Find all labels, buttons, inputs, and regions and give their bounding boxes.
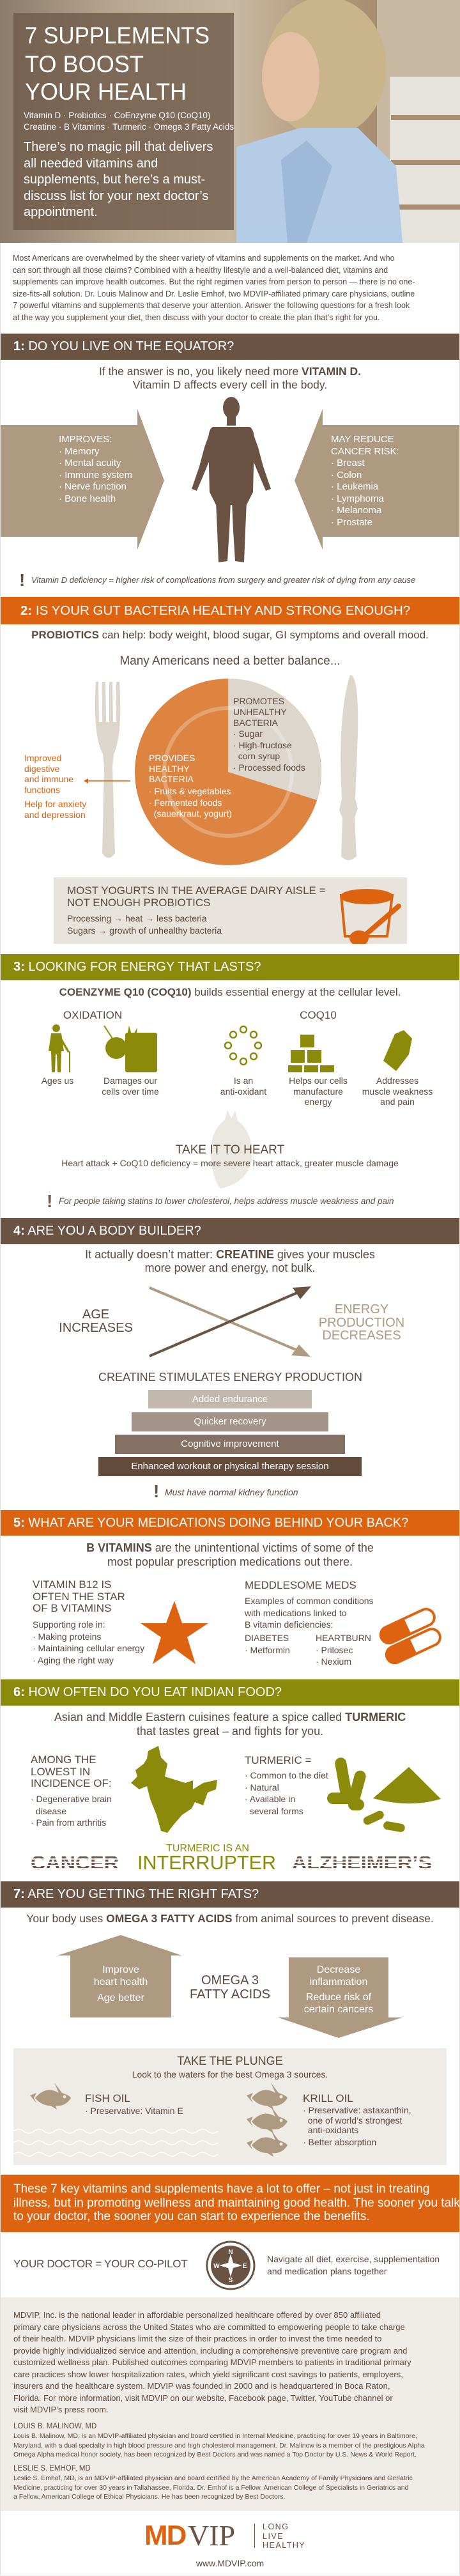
logo MDVIP: LONG — [263, 2522, 289, 2531]
text: Heart attack + CoQ10 deficiency = more severe heart attack, greater muscle damage — [61, 1158, 399, 1168]
improves list: · Bone health — [59, 493, 116, 504]
cancer risk list — [331, 434, 399, 528]
about panel: care practices show lower hospitalization rates, which yield significant cost savings to patients, employers, — [13, 2370, 403, 2379]
benefits text orange: functions — [24, 785, 60, 795]
navigate text: and medication plans together — [267, 2266, 387, 2276]
header 6 — [0, 1679, 460, 1706]
text: · Natural — [245, 1782, 279, 1792]
panel: take the plunge: anti-oxidants — [308, 2125, 358, 2135]
text: with medications linked to — [245, 1608, 347, 1618]
icon: yogurt cup and spoon — [340, 889, 401, 944]
text: · Degenerative brain — [31, 1794, 112, 1804]
hero title box: YOUR HEALTH — [25, 79, 187, 105]
text: · Prilosec — [316, 1645, 353, 1655]
take it to heart: TAKE IT TO HEART — [176, 1143, 284, 1157]
b vitamins intro — [86, 1541, 374, 1568]
text: corn syrup — [238, 751, 280, 761]
text: Damages our — [103, 1076, 157, 1086]
hero title box: Vitamin D · Probiotics · CoEnzyme Q10 (CoQ10) — [24, 111, 210, 120]
header 4: 4: ARE YOU A BODY BUILDER? — [13, 1224, 201, 1238]
cancer risk list: · Leukemia — [331, 481, 378, 492]
header 6: 6: HOW OFTEN DO YOU EAT INDIAN FOOD? — [13, 1685, 282, 1699]
energy decreases: ENERGY — [335, 1302, 388, 1316]
hero title box: 7 SUPPLEMENTS — [25, 22, 210, 49]
b vitamins intro: most popular prescription medications out there. — [107, 1555, 353, 1568]
turmeric interrupter banner: INTERRUPTER — [137, 1851, 276, 1874]
about panel: customized wellness plan. Published outcomes comparing MDVIP members to patients in traditional primary — [13, 2357, 411, 2367]
omega center label — [190, 1973, 270, 2001]
panel: take the plunge — [13, 2048, 447, 2165]
text: · Aging the right way — [33, 1655, 114, 1665]
intro paragraph: 7 powerful vitamins and supplements that deserve your attention. Answer the following questions for a fresh look — [13, 301, 410, 310]
vitamin D intro: Vitamin D affects every cell in the body. — [133, 378, 327, 391]
yogurt callout box: MOST YOGURTS IN THE AVERAGE DAIRY AISLE = — [67, 884, 326, 897]
text: Is an — [234, 1076, 253, 1086]
text: and depression — [24, 810, 86, 820]
yogurt callout box: Sugars → growth of unhealthy bacteria — [67, 925, 222, 936]
about panel: Florida. For more information, visit MDVIP on our website, Facebook page, Twitter, YouTube channel or — [13, 2393, 393, 2403]
hero title box — [13, 13, 234, 230]
down arrow text: Decrease — [317, 1964, 360, 1975]
text: several forms — [250, 1806, 303, 1816]
text: · Fermented foods — [149, 798, 222, 808]
your doctor co-pilot: YOUR DOCTOR = YOUR CO-PILOT — [13, 2258, 187, 2270]
cancer risk list: CANCER RISK: — [331, 446, 399, 456]
about panel: provide highly individualized service and attention, including a comprehensive preventive care program and — [13, 2345, 407, 2356]
age increases — [59, 1307, 133, 1335]
text: Helps our cells — [289, 1076, 348, 1086]
text: certain cancers — [304, 2004, 373, 2014]
vitamin D intro — [99, 365, 361, 391]
about panel: Medicine, practicing for over 30 years in Tallahassee, Florida. Dr. Emhof is a Fellow, American College of Specialists in Geriatrics and — [13, 2483, 408, 2491]
intro paragraph — [13, 254, 415, 322]
label coq10: COQ10 — [300, 1009, 337, 1021]
icon: compass: S — [229, 2277, 233, 2284]
cancer risk list: MAY REDUCE — [331, 434, 394, 445]
about panel: Louis B. Malinow, MD, is an MDVIP-affiliated physician and board certified in Internal Medicine, practicing for over 19 years in Baltimore, — [13, 2432, 417, 2440]
creatine pyramid: Cognitive improvement — [181, 1438, 279, 1449]
text: · Nexium — [316, 1656, 351, 1667]
up arrow text: heart health — [94, 1976, 148, 1987]
down arrow text — [310, 1964, 367, 1987]
plate text: unhealthy: PROMOTES — [233, 696, 284, 706]
note statins: ! — [47, 1191, 52, 1211]
header 2 — [0, 597, 460, 624]
creatine intro: It actually doesn’t matter: CREATINE gives your muscles — [85, 1248, 375, 1261]
note: vitamin D deficiency: Vitamin D deficiency = higher risk of complications from surgery and greater risk of dying from any cause — [31, 575, 415, 585]
closing callout orange — [0, 2175, 460, 2232]
text: disease — [36, 1806, 66, 1816]
hero title box: Creatine · B Vitamins · Turmeric · Omega 3 Fatty Acids — [24, 122, 234, 132]
omega center label: FATTY ACIDS — [190, 1987, 270, 2001]
turmeric interrupter banner: TURMERIC IS AN — [166, 1843, 249, 1854]
text: DIABETES — [245, 1633, 289, 1643]
cancer risk list: · Breast — [331, 458, 365, 468]
plate text: unhealthy: BACTERIA — [233, 718, 278, 728]
b12 panel: VITAMIN B12 IS — [33, 1578, 111, 1591]
turmeric interrupter banner: ALZHEIMER’S — [292, 1853, 432, 1874]
about panel: insurers and the healthcare system. MDVIP was founded in 2000 and is headquartered in Boca Raton, — [13, 2381, 390, 2391]
vitamin D intro: If the answer is no, you likely need more VITAMIN D. — [99, 365, 361, 378]
panel: take the plunge: TAKE THE PLUNGE — [177, 2055, 283, 2067]
benefits text orange — [24, 753, 73, 795]
benefits text orange: and immune — [24, 774, 73, 784]
icon: compass: N — [228, 2249, 233, 2256]
india panel text: LOWEST IN — [31, 1766, 90, 1778]
turmeric intro — [54, 1711, 406, 1738]
logo MDVIP: LIVE — [263, 2532, 284, 2541]
text: Examples of common conditions — [245, 1596, 374, 1606]
note kidney: Must have normal kidney function — [165, 1487, 298, 1497]
text: anti-oxidant — [220, 1086, 266, 1097]
energy decreases: PRODUCTION — [319, 1315, 404, 1329]
captions: Ages us — [42, 1076, 73, 1086]
panel: take the plunge: FISH OIL — [85, 2092, 130, 2104]
website: www.MDVIP.com — [196, 2558, 264, 2568]
intro paragraph: size-fits-all solution. Dr. Louis Malinow and Dr. Leslie Emhof, two MDVIP-affiliated primary care physicians, outline — [13, 289, 415, 298]
b12 panel: OFTEN THE STAR — [33, 1591, 125, 1603]
text: Age better — [97, 1993, 144, 2003]
header 5: 5: WHAT ARE YOUR MEDICATIONS DOING BEHIND YOUR BACK? — [13, 1516, 408, 1530]
intro paragraph: can sort through all those claims? Combined with a healthy lifestyle and a well-balanced diet, vitamins and — [13, 266, 388, 275]
text: · Available in — [245, 1794, 295, 1804]
cancer risk list: · Colon — [331, 469, 362, 481]
balance heading: Many Americans need a better balance... — [119, 654, 341, 668]
logo MDVIP: MD — [144, 2520, 185, 2551]
turmeric intro: that tastes great – and fights for you. — [137, 1725, 323, 1738]
text: Addresses — [376, 1076, 418, 1086]
text: · Fruits & vegetables — [149, 786, 231, 796]
text: · Pain from arthritis — [31, 1817, 106, 1828]
text: · Sugar — [233, 729, 263, 739]
text: and pain — [380, 1097, 415, 1107]
panel: take the plunge: · Better absorption — [303, 2137, 376, 2147]
about panel: Maryland, with a dual specialty in high blood pressure and high cholesterol management. Dr. Malinow is a member of the prestigious Alpha — [13, 2441, 425, 2449]
india panel text: AMONG THE — [31, 1754, 96, 1766]
text: · High-fructose — [233, 740, 292, 750]
improves list: · Mental acuity — [59, 458, 121, 468]
benefits text orange: Improved — [24, 753, 61, 763]
creatine pyramid — [98, 1371, 362, 1476]
plate text: unhealthy: UNHEALTHY — [233, 707, 287, 717]
yogurt callout box: NOT ENOUGH PROBIOTICS — [67, 896, 211, 909]
text: · Maintaining cellular energy — [33, 1643, 144, 1653]
about panel: visit MDVIP’s press room. — [13, 2405, 109, 2414]
navigate text: Navigate all diet, exercise, supplementation — [267, 2254, 440, 2264]
about panel — [0, 2297, 460, 2511]
b12 panel: OF B VITAMINS — [33, 1602, 111, 1614]
benefits text orange: digestive — [24, 764, 59, 774]
hero photo — [0, 0, 460, 243]
yogurt callout box: Processing → heat → less bacteria — [67, 913, 207, 923]
omega intro: Your body uses OMEGA 3 FATTY ACIDS from animal sources to prevent disease. — [26, 1912, 434, 1925]
creatine pyramid: Quicker recovery — [194, 1416, 266, 1427]
cancer risk list: · Lymphoma — [331, 493, 384, 504]
header 4 — [0, 1218, 460, 1244]
creatine pyramid: CREATINE STIMULATES ENERGY PRODUCTION — [98, 1371, 362, 1384]
logo MDVIP: VIP — [188, 2519, 235, 2552]
hero title box: TO BOOST — [25, 51, 144, 77]
header 2: 2: IS YOUR GUT BACTERIA HEALTHY AND STRONG ENOUGH? — [20, 603, 410, 618]
down arrow text: inflammation — [310, 1976, 367, 1987]
logo MDVIP — [144, 2519, 305, 2552]
note: vitamin D deficiency: ! — [19, 570, 25, 590]
closing callout orange: These 7 key vitamins and supplements have a lot to offer – not just in treating — [13, 2182, 429, 2196]
header 3: 3: LOOKING FOR ENERGY THAT LASTS? — [13, 960, 261, 974]
text: HEARTBURN — [316, 1633, 371, 1643]
navigate text — [267, 2254, 440, 2276]
panel: take the plunge: Look to the waters for the best Omega 3 sources. — [132, 2069, 328, 2079]
intro paragraph: Most Americans are overwhelmed by the sheer variety of vitamins and supplements on the market. And who — [13, 254, 395, 263]
age increases: AGE — [82, 1307, 109, 1322]
up arrow text — [94, 1964, 148, 1987]
intro paragraph: at the way you supplement your diet, then discuss with your doctor to create the plan that’s right for you. — [13, 313, 379, 322]
text: Reduce risk of — [306, 1992, 371, 2003]
text: energy — [305, 1097, 332, 1107]
text: · Metformin — [245, 1645, 290, 1655]
about panel: of their health. MDVIP physicians limit the size of their practices in order to invest the time needed to — [13, 2334, 381, 2343]
hero title box: There’s no magic pill that delivers all needed vitamins and supplements, but here’s a must-discuss list for your next doctor’s appointment. — [24, 140, 213, 219]
label oxidation: OXIDATION — [63, 1009, 122, 1021]
creatine pyramid: Added endurance — [192, 1394, 268, 1405]
turmeric panel text: TURMERIC = — [245, 1754, 311, 1766]
header 7 — [0, 1881, 460, 1908]
about panel: LESLIE S. EMHOF, MD — [13, 2465, 91, 2472]
about panel: MDVIP, Inc. is the national leader in affordable personalized healthcare offered by over 850 affiliated — [13, 2310, 381, 2320]
about panel: a Fellow, American College of Ethical Physicians. He has been recognized by Best Doctors. — [13, 2493, 285, 2501]
icon: compass: E — [243, 2263, 247, 2270]
plate text: healthy: PROVIDES — [149, 753, 195, 763]
b12 panel — [33, 1578, 125, 1614]
closing callout orange: to your doctor, the sooner you can start to experience the benefits. — [13, 2210, 370, 2223]
plate text: healthy — [149, 753, 195, 784]
text: B vitamin deficiencies: — [245, 1619, 334, 1630]
cancer risk list: · Prostate — [331, 516, 372, 528]
header 7: 7: ARE YOU GETTING THE RIGHT FATS? — [13, 1887, 259, 1901]
text: (sauerkraut, yogurt) — [154, 808, 232, 819]
omega center label: OMEGA 3 — [201, 1973, 259, 1987]
panel: take the plunge: · Preservative: Vitamin E — [85, 2106, 183, 2116]
improves list — [59, 434, 132, 504]
cancer risk list: · Melanoma — [331, 505, 381, 516]
about panel: Omega Alpha medical honor society, has been recognized by Best Doctors and was named a Top Doctor by U.S. News & World Report. — [13, 2451, 417, 2458]
creatine intro: more power and energy, not bulk. — [145, 1261, 315, 1274]
india panel text: INCIDENCE OF: — [31, 1777, 112, 1789]
energy decreases — [319, 1302, 404, 1343]
panel: take the plunge: · Preservative: astaxanthin, — [303, 2105, 411, 2115]
text: Help for anxiety — [24, 799, 86, 809]
probiotics line: PROBIOTICS can help: body weight, blood sugar, GI symptoms and overall mood. — [31, 629, 429, 641]
yogurt callout box — [54, 877, 407, 944]
panel: take the plunge: KRILL OIL — [303, 2092, 353, 2104]
note: vitamin D deficiency — [19, 570, 415, 590]
plate text: unhealthy — [233, 696, 287, 728]
turmeric interrupter banner: CANCER — [31, 1853, 119, 1874]
improves list: IMPROVES: — [59, 434, 112, 445]
plate text: healthy: BACTERIA — [149, 774, 194, 784]
header 3 — [0, 954, 460, 980]
text: cells over time — [102, 1086, 159, 1097]
text: Supporting role in: — [33, 1619, 105, 1630]
creatine intro — [85, 1248, 375, 1274]
b vitamins intro: B VITAMINS are the unintentional victims of some of the — [86, 1541, 374, 1554]
note statins — [47, 1191, 394, 1211]
header 1: 1: DO YOU LIVE ON THE EQUATOR? — [13, 339, 234, 353]
turmeric intro: Asian and Middle Eastern cuisines feature a spice called TURMERIC — [54, 1711, 406, 1724]
header 1 — [0, 334, 460, 360]
note kidney — [153, 1481, 298, 1501]
note kidney: ! — [153, 1481, 159, 1501]
closing callout orange: illness, but in promoting wellness and maintaining good health. The sooner you talk — [13, 2196, 460, 2210]
creatine pyramid: Enhanced workout or physical therapy session — [131, 1461, 329, 1472]
intro paragraph: supplements can improve health outcomes. But the right regimen varies from person to person — there is no one- — [13, 277, 415, 286]
age increases: INCREASES — [59, 1321, 133, 1335]
meddlesome meds panel: MEDDLESOME MEDS — [245, 1579, 356, 1591]
text: manufacture — [293, 1086, 343, 1097]
about panel: primary care physicians across the United States who are committed to empowering people to take charge — [13, 2322, 405, 2331]
improves list: · Nerve function — [59, 481, 126, 492]
improves list: · Memory — [59, 446, 99, 456]
energy decreases: DECREASES — [322, 1329, 401, 1343]
note statins: For people taking statins to lower cholesterol, helps address muscle weakness and pain — [59, 1196, 394, 1206]
india panel text — [31, 1754, 112, 1789]
header 5 — [0, 1510, 460, 1536]
logo MDVIP: HEALTHY — [263, 2541, 305, 2550]
up arrow text: Improve — [102, 1964, 139, 1975]
improves list: · Immune system — [59, 469, 132, 481]
plate text: healthy: HEALTHY — [149, 763, 190, 773]
coq10 line: COENZYME Q10 (COQ10) builds essential energy at the cellular level. — [59, 986, 401, 998]
text: · Making proteins — [33, 1631, 101, 1641]
icon: compass: W — [213, 2263, 220, 2270]
about panel: LOUIS B. MALINOW, MD — [13, 2423, 96, 2430]
text: muscle weakness — [362, 1086, 433, 1097]
panel: take the plunge: one of world’s strongest — [308, 2115, 402, 2125]
about panel: Leslie S. Emhof, MD, is an MDVIP-affiliated physician and board certified by the American Academy of Family Physicians and Geriatric — [13, 2474, 413, 2482]
text: · Common to the diet — [245, 1770, 328, 1780]
text: · Processed foods — [233, 762, 305, 772]
